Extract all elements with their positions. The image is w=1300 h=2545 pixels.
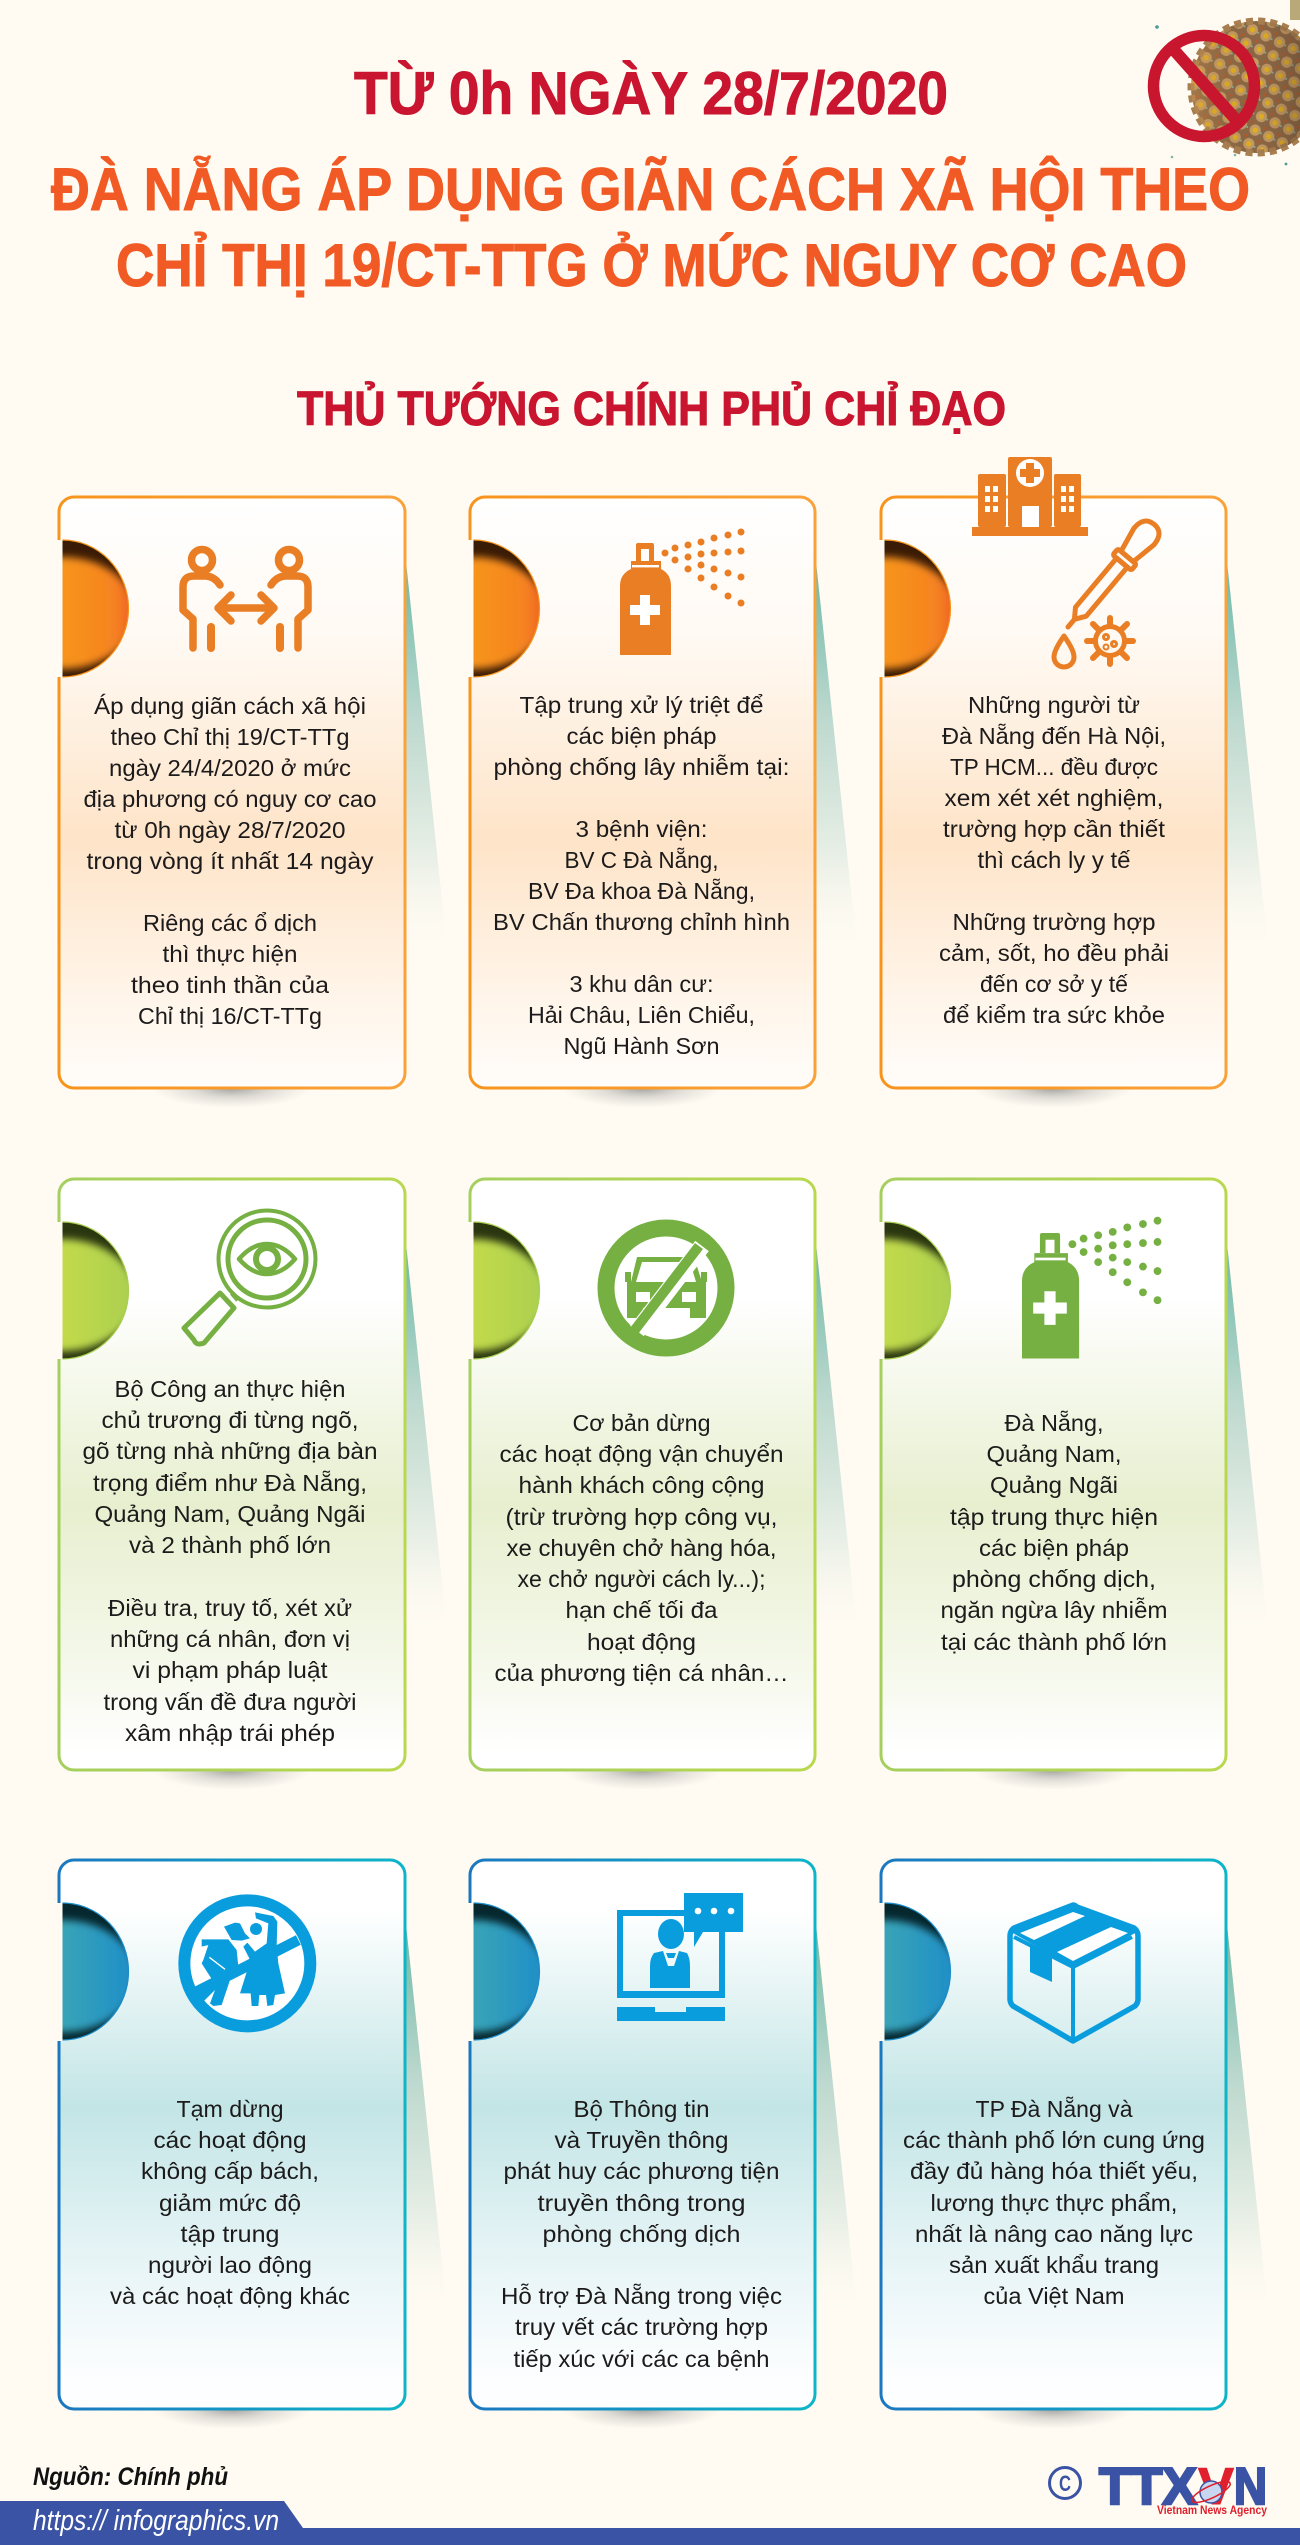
text: three localities: ngăn ngừa lây nhiễm <box>940 1597 1168 1623</box>
text: three localities: tập trung thực hiện <box>950 1504 1158 1530</box>
text: disinfection: Tập trung xử lý triệt để <box>520 692 764 718</box>
text: testing: thì cách ly y tế <box>978 847 1130 873</box>
text: non-urgent activities: người lao động <box>148 2252 312 2278</box>
text: public security: trọng điểm như Đà Nẵng, <box>93 1469 367 1496</box>
text: disinfection: Hải Châu, Liên Chiểu, <box>528 1002 755 1028</box>
text: public security: những cá nhân, đơn vị <box>110 1626 350 1652</box>
text: public security: gõ từng nhà những địa bàn <box>82 1438 378 1464</box>
title: main heading <box>51 156 1250 299</box>
text: disinfection: BV Đa khoa Đà Nẵng, <box>528 877 755 904</box>
text: disinfection: các biện pháp <box>566 723 716 749</box>
panel: public transport <box>400 1179 858 1790</box>
text: public security: Điều tra, truy tố, xét xử <box>108 1595 352 1621</box>
text: supplies: TP Đà Nẵng và <box>976 2095 1133 2122</box>
text: public security: trong vấn đề đưa người <box>104 1689 356 1715</box>
text: non-urgent activities: các hoạt động <box>154 2127 306 2153</box>
text: testing: xem xét xét nghiệm, <box>944 785 1164 811</box>
text: supplies: đầy đủ hàng hóa thiết yếu, <box>910 2158 1198 2184</box>
text: public security: Quảng Nam, Quảng Ngãi <box>94 1501 366 1527</box>
title: main heading: CHỈ THỊ 19/CT-TTG Ở MỨC NGUY CƠ CAO <box>116 232 1187 299</box>
panel: public security <box>0 1179 448 1790</box>
text: three localities: Đà Nẵng, <box>1004 1409 1104 1436</box>
text: public transport: xe chở người cách ly...); <box>518 1566 766 1592</box>
icon: package box <box>1010 1905 1138 2041</box>
text: disinfection: 3 bệnh viện: <box>576 816 708 842</box>
icon: green spray bottle <box>1022 1217 1161 1358</box>
text: public security <box>82 1376 378 1746</box>
text: supplies: lương thực thực phẩm, <box>930 2190 1178 2216</box>
text: media: phòng chống dịch <box>542 2221 740 2247</box>
text: testing: trường hợp cần thiết <box>943 816 1165 842</box>
text: media: Hỗ trợ Đà Nẵng trong việc <box>501 2282 782 2309</box>
footer bar <box>0 2501 1300 2545</box>
text: public transport <box>494 1410 788 1686</box>
text: testing: Những người từ <box>968 692 1140 718</box>
text: public transport: hoạt động <box>587 1629 696 1655</box>
text: disinfection: Ngũ Hành Sơn <box>564 1033 720 1059</box>
source note: Nguồn: Chính phủ <box>33 2463 228 2491</box>
icon: hospital <box>972 457 1088 536</box>
text: public security: xâm nhập trái phép <box>125 1720 335 1746</box>
text: public security: Bộ Công an thực hiện <box>114 1376 346 1402</box>
text: supplies: nhất là nâng cao năng lực <box>915 2221 1193 2247</box>
text: media: Bộ Thông tin <box>574 2096 710 2122</box>
text: distancing <box>84 693 376 1029</box>
logo: TTXVN: Vietnam News Agency <box>1157 2503 1267 2517</box>
text: media: phát huy các phương tiện <box>504 2158 780 2184</box>
text: media: tiếp xúc với các ca bệnh <box>514 2346 770 2372</box>
text: media <box>501 2096 782 2372</box>
icon: dropper and virus <box>1054 516 1164 667</box>
icon: spray bottle <box>620 528 744 655</box>
title: date line: TỪ 0h NGÀY 28/7/2020 <box>354 60 948 127</box>
icon: monitor with speaker <box>617 1893 743 2021</box>
logo: TTXVN: TTX <box>1099 2458 1197 2516</box>
icon: no gathering <box>184 1900 310 2026</box>
text: non-urgent activities: không cấp bách, <box>141 2158 319 2184</box>
illustration: crossed-out virus <box>1154 0 1300 165</box>
text: testing: Những trường hợp <box>952 909 1156 935</box>
text: testing: Đà Nẵng đến Hà Nội, <box>942 722 1166 749</box>
logo: TTXVN: V <box>1198 2458 1234 2516</box>
text: public transport: các hoạt động vận chuyển <box>500 1441 784 1467</box>
text: testing: để kiểm tra sức khỏe <box>943 1002 1165 1028</box>
logo: TTXVN: N <box>1234 2458 1267 2516</box>
text: non-urgent activities: giảm mức độ <box>159 2190 301 2216</box>
panel: media <box>400 1860 858 2429</box>
text: media: truyền thông trong <box>538 2190 746 2216</box>
text: public transport: (trừ trường hợp công vụ, <box>506 1504 778 1530</box>
text: disinfection <box>493 692 790 1059</box>
text: three localities: tại các thành phố lớn <box>941 1629 1167 1655</box>
text: testing: đến cơ sở y tế <box>980 971 1128 997</box>
text: public transport: hành khách công cộng <box>518 1472 764 1498</box>
icon: no cars <box>606 1228 726 1348</box>
icon: magnifier with eye <box>184 1210 316 1344</box>
text: distancing: Chỉ thị 16/CT-TTg <box>138 1003 322 1029</box>
panel: distancing <box>0 497 448 1108</box>
text: public transport: xe chuyên chở hàng hóa, <box>506 1535 776 1561</box>
text: distancing: theo Chỉ thị 19/CT-TTg <box>110 724 350 750</box>
text: public security: vi phạm pháp luật <box>132 1657 328 1683</box>
heading: prime minister directs: THỦ TƯỚNG CHÍNH PHỦ CHỈ ĐẠO <box>297 381 1006 436</box>
text: distancing: trong vòng ít nhất 14 ngày <box>86 848 374 874</box>
text: public security: chủ trương đi từng ngõ, <box>102 1407 358 1433</box>
text: distancing: Áp dụng giãn cách xã hội <box>94 693 366 719</box>
text: three localities: các biện pháp <box>979 1535 1129 1561</box>
text: public transport: của phương tiện cá nhân… <box>494 1660 788 1686</box>
text: supplies: sản xuất khẩu trang <box>949 2252 1159 2278</box>
text: disinfection: BV C Đà Nẵng, <box>564 846 718 873</box>
text: three localities: phòng chống dịch, <box>952 1566 1156 1592</box>
text: three localities: Quảng Nam, <box>986 1441 1122 1467</box>
panel: non-urgent activities <box>0 1860 448 2429</box>
text: testing: cảm, sốt, ho đều phải <box>939 940 1169 966</box>
text: disinfection: phòng chống lây nhiễm tại: <box>494 754 790 780</box>
text: supplies: các thành phố lớn cung ứng <box>903 2127 1205 2153</box>
footer url: https:// infographics.vn <box>33 2505 279 2537</box>
text: disinfection: BV Chấn thương chỉnh hình <box>493 909 790 935</box>
text: three localities <box>940 1409 1168 1655</box>
text: non-urgent activities <box>110 2096 350 2309</box>
text: supplies: của Việt Nam <box>984 2283 1124 2309</box>
text: non-urgent activities: Tạm dừng <box>176 2096 284 2122</box>
text: distancing: theo tinh thần của <box>131 972 330 998</box>
logo: TTXVN: C <box>1059 2471 1071 2496</box>
text: public transport: Cơ bản dừng <box>572 1410 710 1436</box>
text: testing: TP HCM... đều được <box>950 754 1158 780</box>
text: distancing: Riêng các ổ dịch <box>143 910 317 936</box>
text: distancing: từ 0h ngày 28/7/2020 <box>114 817 346 843</box>
logo: TTXVN <box>1050 2458 1267 2517</box>
text: public security: và 2 thành phố lớn <box>129 1532 331 1558</box>
text: non-urgent activities: và các hoạt động khác <box>110 2283 350 2309</box>
panel: testing <box>810 457 1269 1108</box>
text: media: và Truyền thông <box>554 2127 728 2153</box>
text: disinfection: 3 khu dân cư: <box>570 971 714 997</box>
icon: two people keeping distance <box>183 550 308 648</box>
text: distancing: ngày 24/4/2020 ở mức <box>109 755 351 781</box>
text: non-urgent activities: tập trung <box>180 2221 280 2247</box>
panel: supplies <box>810 1860 1269 2429</box>
panel: three localities <box>810 1179 1269 1790</box>
text: media: truy vết các trường hợp <box>515 2314 768 2340</box>
text: testing <box>939 692 1169 1028</box>
text: distancing: địa phương có nguy cơ cao <box>84 786 376 812</box>
text: public transport: hạn chế tối đa <box>566 1597 718 1623</box>
panel: disinfection <box>400 497 858 1108</box>
text: supplies <box>903 2095 1205 2309</box>
text: three localities: Quảng Ngãi <box>990 1472 1118 1498</box>
text: distancing: thì thực hiện <box>162 941 298 967</box>
